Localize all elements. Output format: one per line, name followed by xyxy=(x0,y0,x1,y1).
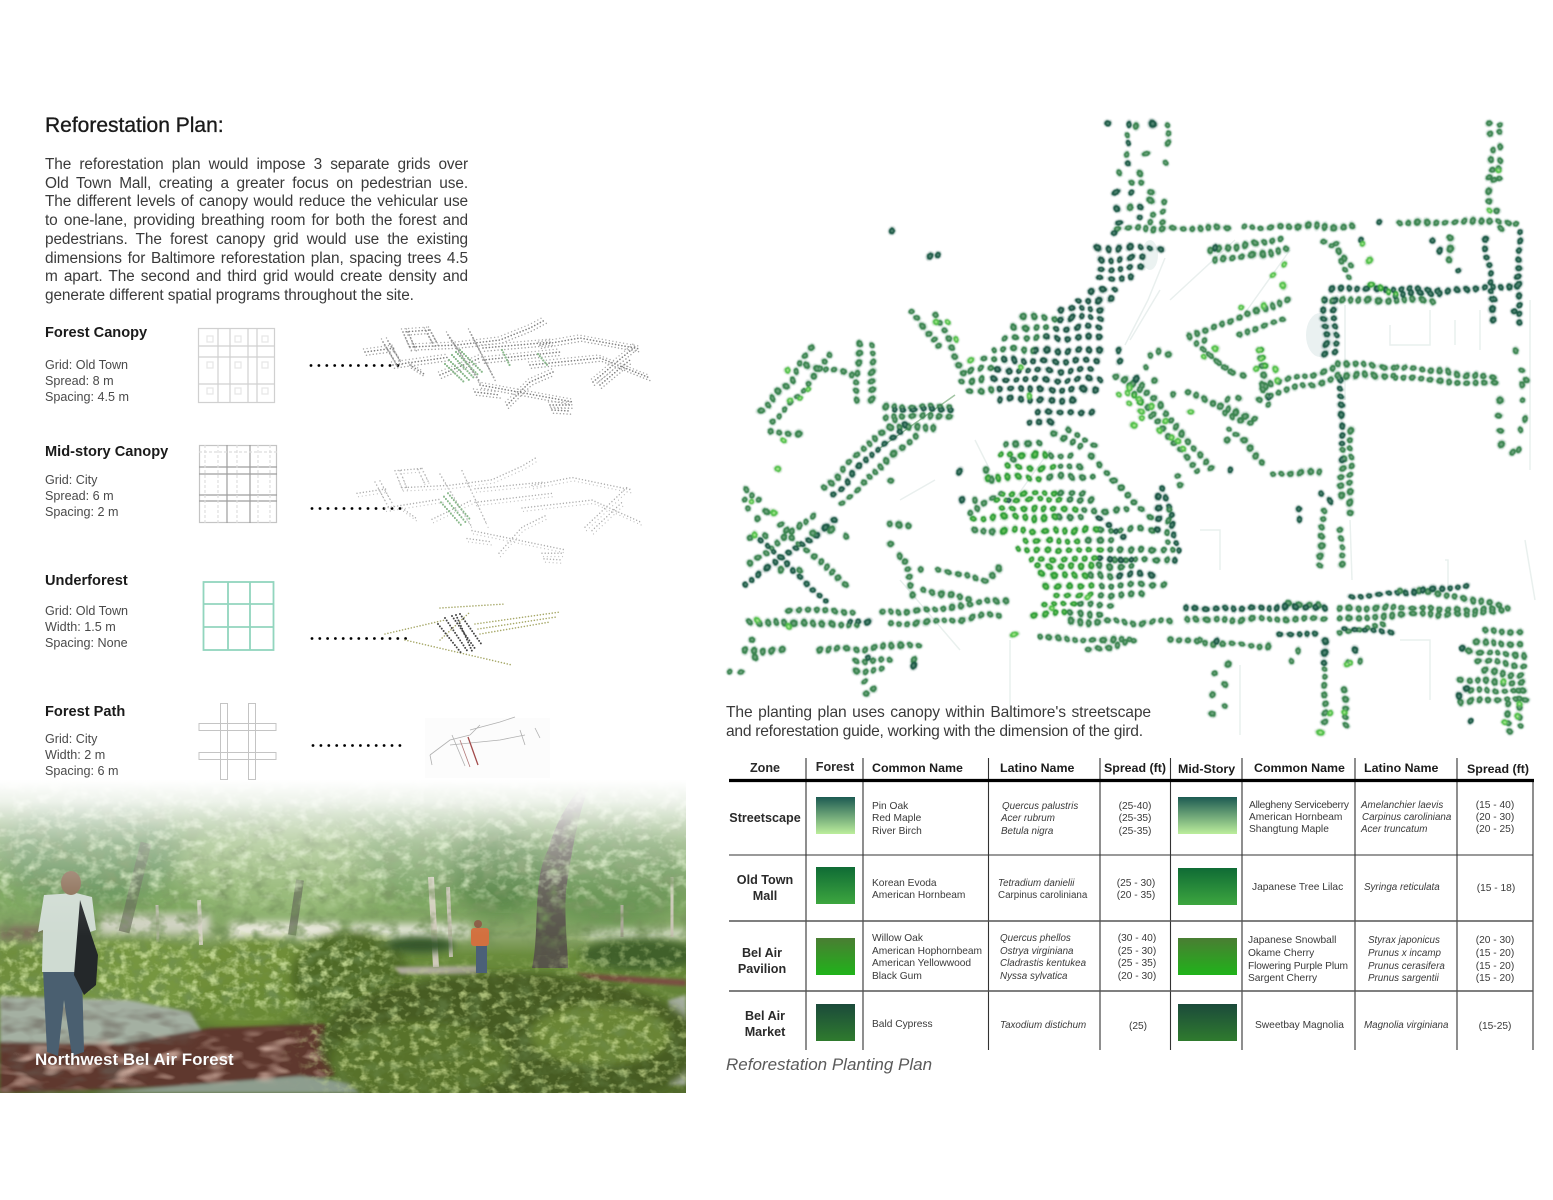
row: Old Town Mall: Mall xyxy=(753,889,777,903)
photo: bright building band xyxy=(0,914,686,940)
specs: forest canopy: Grid: Old Town xyxy=(45,358,128,372)
row: Bel Air Pavilion: Willow Oak xyxy=(872,933,924,944)
specs: forest path: Width: 2 m xyxy=(45,748,105,762)
photo: canopy leaf texture xyxy=(4,816,686,948)
row: Old Town Mall: Syringa reticulata xyxy=(1364,882,1440,893)
row: Old Town Mall: Old Town xyxy=(737,873,793,887)
row: Bel Air Pavilion: (25 - 35) xyxy=(1118,958,1156,969)
leader: underforest xyxy=(312,637,406,640)
icon: forest path grid xyxy=(199,704,276,780)
tree crowns xyxy=(730,123,1528,735)
row: Old Town Mall: Tetradium danielii xyxy=(998,878,1075,889)
row: Streetscape: Red Maple xyxy=(872,813,922,824)
intro paragraph: The reforestation plan would impose 3 separate grids over xyxy=(45,156,468,173)
row: Streetscape: Streetscape xyxy=(729,811,801,825)
icon: forest canopy grid xyxy=(198,328,274,402)
row: Streetscape: Pin Oak xyxy=(872,801,909,812)
row: Bel Air Pavilion: Okame Cherry xyxy=(1248,948,1315,959)
table header: Forest xyxy=(816,760,855,774)
table header: Common Name xyxy=(872,761,963,775)
heading: mid-story canopy: Mid-story Canopy xyxy=(45,444,168,460)
intro paragraph: The different levels of canopy would reduce the vehicular use xyxy=(45,193,468,210)
leader: forest canopy xyxy=(311,364,398,367)
row: Old Town Mall: Carpinus caroliniana xyxy=(998,890,1088,901)
row: Bel Air Market: (25) xyxy=(1129,1021,1147,1032)
row: Bel Air Pavilion: Ostrya virginiana xyxy=(1000,946,1074,957)
icon: mid-story grid xyxy=(199,445,277,523)
row: Bel Air Pavilion: Flowering Purple Plum xyxy=(1248,961,1348,972)
intro paragraph xyxy=(45,156,468,304)
map caption xyxy=(726,704,1151,740)
row: Bel Air Pavilion: Pavilion xyxy=(738,962,786,976)
row: Bel Air Pavilion: (20 - 30) xyxy=(1476,935,1514,946)
row: Bel Air Pavilion: American Yellowwood xyxy=(872,958,971,969)
photo: person in orange shirt xyxy=(471,920,489,973)
row: Old Town Mall xyxy=(737,867,1515,905)
photo: Northwest Bel Air Forest rendering xyxy=(0,788,686,1093)
row: Bel Air Market xyxy=(745,1004,1511,1041)
row: Bel Air Pavilion: Japanese Snowball xyxy=(1248,935,1336,946)
row: Old Town Mall: (25 - 30) xyxy=(1117,878,1155,889)
table rules xyxy=(729,758,1534,1050)
row: Streetscape: American Hornbeam xyxy=(1249,812,1342,823)
planting table xyxy=(729,758,1534,1050)
specs: forest canopy xyxy=(45,358,129,404)
map caption: and reforestation guide, working with the dimension of the gird. xyxy=(726,723,1143,740)
row: Streetscape: (15 - 40) xyxy=(1476,800,1514,811)
specs: forest path: Grid: City xyxy=(45,732,97,746)
row: Old Town Mall: (20 - 35) xyxy=(1117,890,1155,901)
table caption: Reforestation Planting Plan xyxy=(726,1055,932,1074)
row: Streetscape: (25-40) xyxy=(1119,801,1151,812)
row: Bel Air Pavilion: (15 - 20) xyxy=(1476,948,1514,959)
heading: underforest: Underforest xyxy=(45,573,128,589)
intro paragraph: m apart. The second and third grid would create density and xyxy=(45,268,468,285)
heading: forest path: Forest Path xyxy=(45,704,125,720)
row: Old Town Mall: Japanese Tree Lilac xyxy=(1252,882,1343,893)
row: Old Town Mall: Korean Evoda xyxy=(872,878,937,889)
specs: underforest: Grid: Old Town xyxy=(45,604,128,618)
intro paragraph: generate different spatial programs throughout the site. xyxy=(45,287,414,304)
row: Old Town Mall: (15 - 18) xyxy=(1477,883,1515,894)
row: Bel Air Pavilion: Nyssa sylvatica xyxy=(1000,971,1068,982)
row: Bel Air Pavilion: (20 - 30) xyxy=(1118,971,1156,982)
intro paragraph: pedestrians. The forest canopy grid would use the existing xyxy=(45,231,468,248)
row: Streetscape: Acer rubrum xyxy=(1000,813,1055,824)
row: Streetscape: (25-35) xyxy=(1119,813,1151,824)
row: Bel Air Pavilion: (15 - 20) xyxy=(1476,961,1514,972)
tree halos xyxy=(730,123,1528,735)
table header: Zone xyxy=(750,761,780,775)
photo: lower right shrubs xyxy=(316,968,686,1093)
photo: tree trunks xyxy=(124,843,672,967)
row: Bel Air Pavilion: Prunus sargentii xyxy=(1368,973,1440,984)
row: Bel Air Pavilion: Styrax japonicus xyxy=(1368,935,1440,946)
row: Bel Air Market: Bel Air xyxy=(745,1009,785,1023)
row: Old Town Mall: American Hornbeam xyxy=(872,890,965,901)
specs: forest canopy: Spread: 8 m xyxy=(45,374,114,388)
row: Bel Air Pavilion: (15 - 20) xyxy=(1476,973,1514,984)
row: Streetscape: Betula nigra xyxy=(1001,826,1054,837)
leader: mid-story canopy xyxy=(312,507,401,510)
row: Bel Air Market: Taxodium distichum xyxy=(1000,1020,1086,1031)
row: Streetscape: River Birch xyxy=(872,826,922,837)
specs: forest path xyxy=(45,732,119,778)
row: Bel Air Pavilion: Black Gum xyxy=(872,971,922,982)
photo: pavement and red path xyxy=(0,966,686,1093)
row: Streetscape: Shangtung Maple xyxy=(1249,824,1329,835)
tree centres xyxy=(730,123,1528,735)
row: Bel Air Pavilion: Cladrastis kentukea xyxy=(1000,958,1087,969)
row: Bel Air Pavilion: (30 - 40) xyxy=(1118,933,1156,944)
row: Bel Air Pavilion: Sargent Cherry xyxy=(1248,973,1318,984)
intro paragraph: dimensions for Baltimore reforestation plan, spacing trees 4.5 xyxy=(45,250,468,267)
icon: underforest grid xyxy=(203,582,274,650)
map caption: The planting plan uses canopy within Baltimore's streetscape xyxy=(726,704,1151,721)
table header: Mid-Story xyxy=(1178,762,1235,776)
table header: Common Name xyxy=(1254,761,1345,775)
row: Bel Air Pavilion: Bel Air xyxy=(742,946,782,960)
specs: forest path: Spacing: 6 m xyxy=(45,764,119,778)
row: Bel Air Pavilion xyxy=(738,933,1514,984)
row: Bel Air Market: Market xyxy=(745,1025,786,1039)
table header: Latino Name xyxy=(1364,761,1438,775)
specs: underforest: Spacing: None xyxy=(45,636,128,650)
row: Streetscape: (25-35) xyxy=(1119,826,1151,837)
specs: underforest: Width: 1.5 m xyxy=(45,620,116,634)
specs: mid-story canopy: Grid: City xyxy=(45,473,97,487)
table header: Spread (ft) xyxy=(1104,761,1166,775)
axonometric plan: forest canopy xyxy=(364,317,652,414)
intro paragraph: Old Town Mall, creating a greater focus on pedestrian use. xyxy=(45,175,468,192)
row: Streetscape: Acer truncatum xyxy=(1360,824,1427,835)
row: Bel Air Pavilion: Quercus phellos xyxy=(1000,933,1071,944)
map: faint site linework xyxy=(880,240,1535,735)
row: Bel Air Pavilion: Prunus cerasifera xyxy=(1368,961,1445,972)
row: Streetscape: Allegheny Serviceberry xyxy=(1249,800,1350,811)
specs: mid-story canopy: Spacing: 2 m xyxy=(45,505,119,519)
leader: forest path xyxy=(313,744,401,747)
row: Bel Air Market: Bald Cypress xyxy=(872,1019,933,1030)
row: Bel Air Market: Sweetbay Magnolia xyxy=(1255,1020,1344,1031)
table header: Spread (ft) xyxy=(1467,762,1529,776)
axonometric plan: forest path xyxy=(425,717,550,778)
photo: person in white shirt xyxy=(38,871,98,1056)
row: Streetscape: Amelanchier laevis xyxy=(1360,800,1443,811)
map: tree planting plan xyxy=(730,123,1528,735)
photo: shrubs xyxy=(0,932,700,1030)
row: Bel Air Pavilion: (25 - 30) xyxy=(1118,946,1156,957)
specs: forest canopy: Spacing: 4.5 m xyxy=(45,390,129,404)
title: Reforestation Plan: xyxy=(45,114,224,137)
row: Streetscape: (20 - 30) xyxy=(1476,812,1514,823)
axonometric plan: underforest xyxy=(385,604,560,665)
intro paragraph: to one-lane, providing breathing room for both the forest and xyxy=(45,212,468,229)
row: Streetscape: Carpinus caroliniana xyxy=(1362,812,1452,823)
photo caption: Northwest Bel Air Forest xyxy=(35,1050,234,1069)
table header: Latino Name xyxy=(1000,761,1074,775)
row: Streetscape: (20 - 25) xyxy=(1476,824,1514,835)
row: Streetscape xyxy=(729,797,1514,837)
row: Bel Air Market: (15-25) xyxy=(1479,1021,1511,1032)
row: Streetscape: Quercus palustris xyxy=(1002,801,1078,812)
heading: forest canopy: Forest Canopy xyxy=(45,325,147,341)
axonometric plan: mid-story canopy xyxy=(357,457,644,563)
specs: underforest xyxy=(45,604,128,650)
specs: mid-story canopy xyxy=(45,473,119,519)
table header xyxy=(750,760,1529,776)
row: Bel Air Market: Magnolia virginiana xyxy=(1364,1020,1449,1031)
row: Bel Air Pavilion: American Hophornbeam xyxy=(872,946,982,957)
specs: mid-story canopy: Spread: 6 m xyxy=(45,489,114,503)
row: Bel Air Pavilion: Prunus x incamp xyxy=(1368,948,1442,959)
